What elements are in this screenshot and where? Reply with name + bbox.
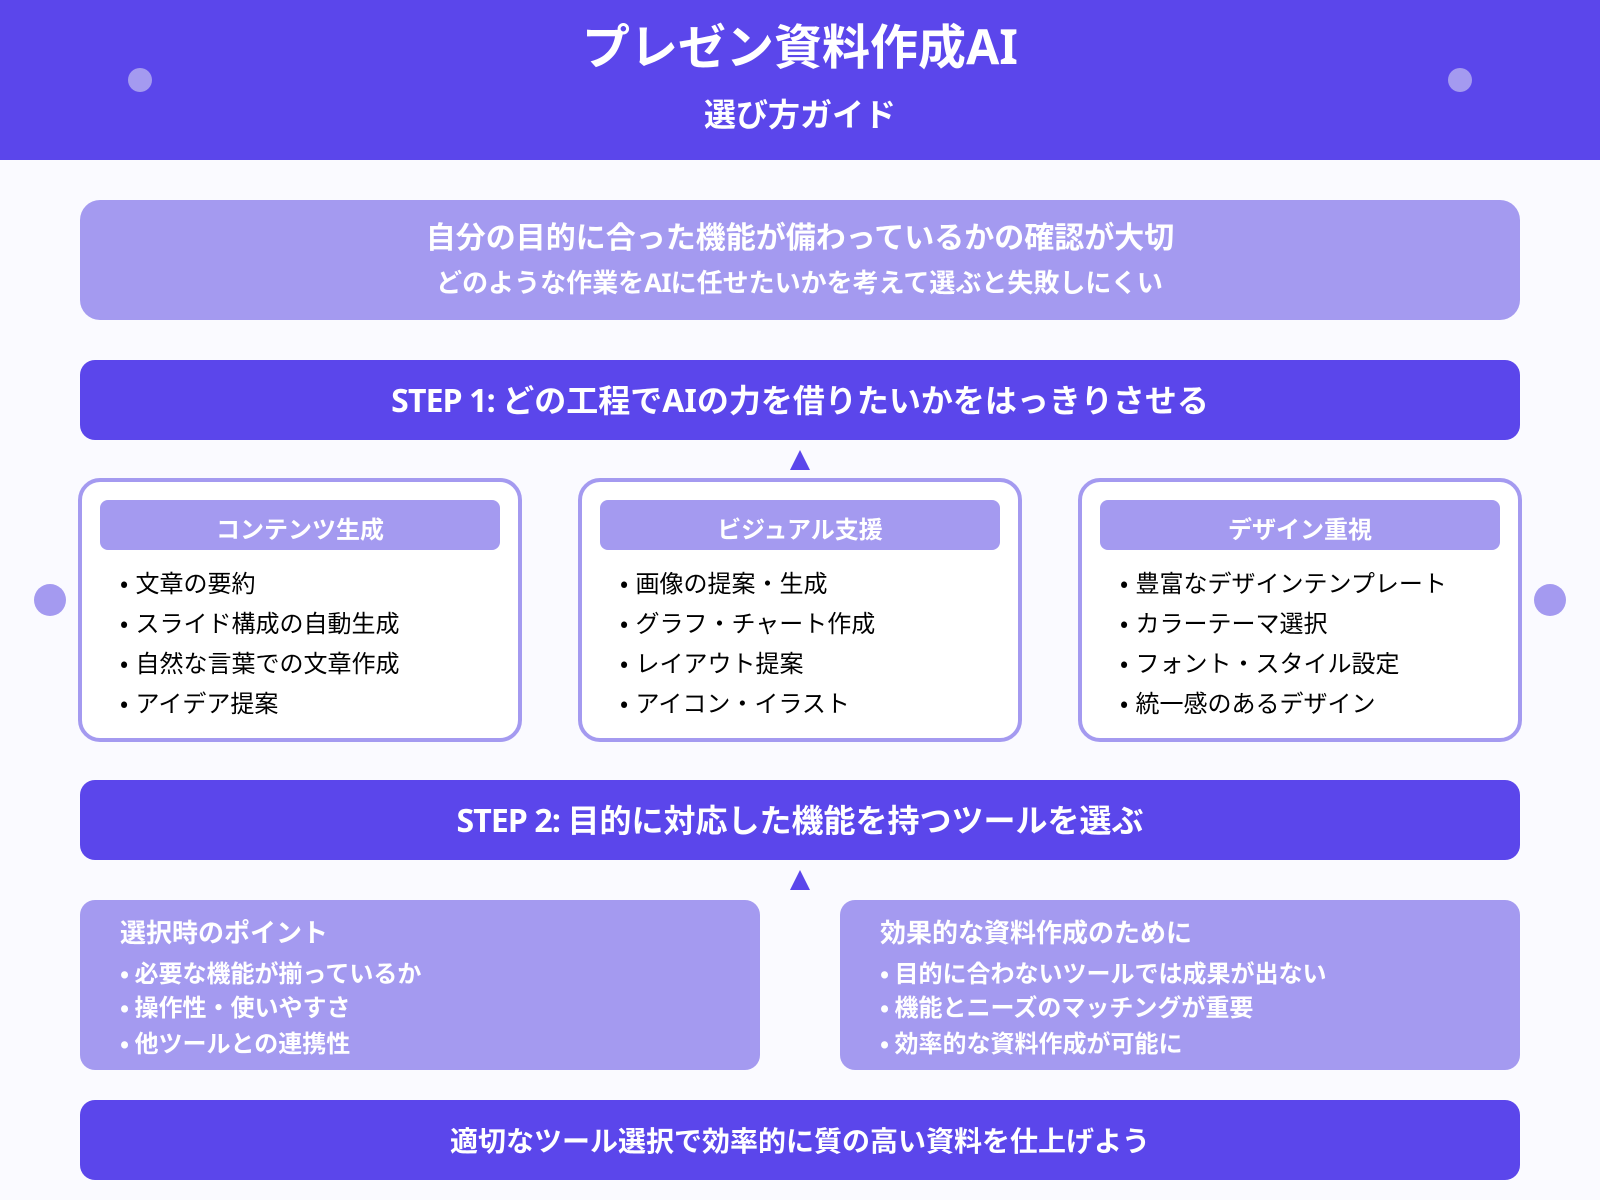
header band: [0, 0, 1600, 160]
step 1 banner: STEP 1: どの工程でAIの力を借りたいかをはっきりさせる: [391, 376, 1209, 422]
panel: visual support: • アイコン・イラスト: [620, 684, 850, 719]
conclusion banner: [80, 1100, 1520, 1180]
panel: design focus: デザイン重視: [1228, 510, 1372, 545]
arrow: step 2: [790, 870, 810, 890]
header dot right: [1448, 68, 1472, 92]
panel: design focus: • カラーテーマ選択: [1120, 604, 1328, 639]
panel: effective materials: • 目的に合わないツールでは成果が出ない: [880, 954, 1327, 989]
panel: content generation: コンテンツ生成: [216, 510, 384, 545]
intro panel: [80, 200, 1520, 320]
panel: selection points: • 他ツールとの連携性: [120, 1024, 350, 1059]
panel: content generation: • スライド構成の自動生成: [120, 604, 400, 639]
panel: visual support: • 画像の提案・生成: [620, 564, 828, 599]
panel: content generation: • 自然な言葉での文章作成: [120, 644, 400, 679]
panel: design focus: • フォント・スタイル設定: [1120, 644, 1400, 679]
panel: effective materials: • 機能とニーズのマッチングが重要: [880, 988, 1253, 1023]
conclusion banner: 適切なツール選択で効率的に質の高い資料を仕上げよう: [450, 1120, 1150, 1160]
arrow: step 1: [790, 450, 810, 470]
step 2 banner: [80, 780, 1520, 860]
panel: selection points: [80, 900, 760, 1070]
title: プレゼン資料作成AI: [582, 8, 1018, 79]
panel: content generation: • 文章の要約: [120, 564, 256, 599]
panel: content generation: [80, 480, 520, 740]
header dot left: [128, 68, 152, 92]
panel: visual support: • グラフ・チャート作成: [620, 604, 875, 639]
intro panel: 自分の目的に合った機能が備わっているかの確認が大切: [426, 213, 1174, 257]
panel: content generation: • アイデア提案: [120, 684, 278, 719]
subtitle: 選び方ガイド: [704, 90, 896, 136]
panel: visual support: ビジュアル支援: [717, 510, 883, 545]
panel: selection points: 選択時のポイント: [120, 913, 328, 950]
panel: effective materials: • 効率的な資料作成が可能に: [880, 1024, 1183, 1059]
panel: selection points: • 操作性・使いやすさ: [120, 988, 351, 1023]
panel: selection points: • 必要な機能が揃っているか: [120, 954, 421, 989]
step 2 banner: STEP 2: 目的に対応した機能を持つツールを選ぶ: [456, 796, 1144, 842]
panel: design focus: • 豊富なデザインテンプレート: [1120, 564, 1447, 599]
step 1 banner: [80, 360, 1520, 440]
panel: design focus: • 統一感のあるデザイン: [1120, 684, 1376, 719]
panel: effective materials: 効果的な資料作成のために: [880, 913, 1192, 950]
intro panel: どのような作業をAIに任せたいかを考えて選ぶと失敗しにくい: [436, 263, 1163, 300]
side dot right: [1534, 584, 1566, 616]
panel: visual support: • レイアウト提案: [620, 644, 804, 679]
panel: effective materials: [840, 900, 1520, 1070]
panel: visual support: [580, 480, 1020, 740]
side dot left: [34, 584, 66, 616]
panel: design focus: [1080, 480, 1520, 740]
